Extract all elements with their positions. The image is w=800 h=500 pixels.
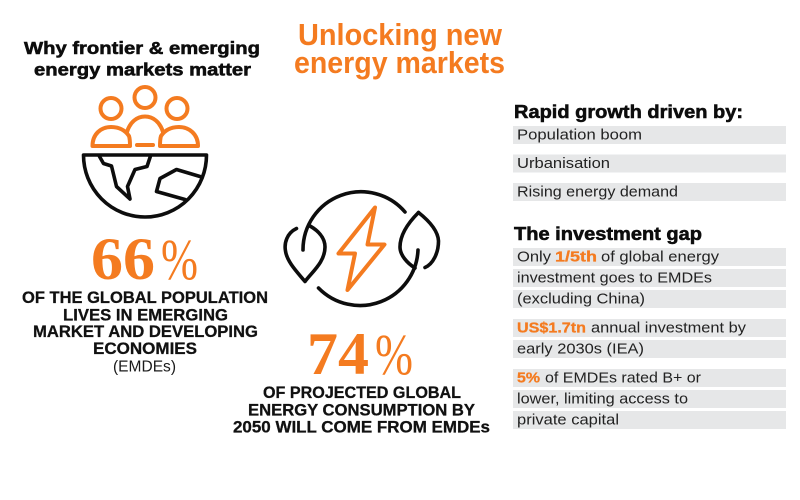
item: urbanisation xyxy=(513,154,786,172)
text: consumption description: 2050 WILL COME FROM EMDEs xyxy=(233,418,490,436)
panel: rapid growth xyxy=(513,102,786,201)
item: rising energy demand xyxy=(513,183,786,201)
text: population description: OF THE GLOBAL POPULATION xyxy=(22,288,268,307)
item: urbanisation: Urbanisation xyxy=(517,155,610,172)
text: consumption description: OF PROJECTED GLOBAL xyxy=(263,383,461,402)
item: credit ratings: private capital xyxy=(517,412,619,428)
text: population description: ECONOMIES xyxy=(93,339,197,358)
title: energy markets xyxy=(294,45,505,80)
item: annual investment: annual investment by xyxy=(591,320,747,336)
heading: rapid growth: Rapid growth driven by: xyxy=(514,102,743,122)
stat: 74% xyxy=(307,321,413,387)
title: Unlocking new xyxy=(298,17,503,52)
stat: 74%: % xyxy=(375,322,413,387)
item: one fifth of investment: 1/5th xyxy=(555,248,597,266)
panel: investment gap xyxy=(513,224,786,429)
item: one fifth of investment: (excluding China) xyxy=(517,290,645,308)
icon: globe xyxy=(84,155,206,217)
icon: lightning bolt xyxy=(338,208,384,290)
icon: cycle arrows and leaves xyxy=(285,192,438,306)
left heading xyxy=(24,38,260,80)
item: annual investment: US$1.7tn xyxy=(517,320,586,336)
item: population boom xyxy=(513,126,786,144)
item: one fifth of investment: Only xyxy=(517,248,552,266)
item: population boom: Population boom xyxy=(517,126,642,144)
icon: energy cycle with leaves and bolt xyxy=(285,192,438,306)
stat: 66%: 66 xyxy=(91,226,155,292)
item: credit ratings: lower, limiting access to xyxy=(517,390,688,408)
text: population description: LIVES IN EMERGING xyxy=(63,306,228,324)
heading: investment gap: The investment gap xyxy=(514,224,702,244)
text: population description xyxy=(22,288,268,376)
text: consumption description: ENERGY CONSUMPTION BY xyxy=(248,400,476,420)
text: consumption description xyxy=(233,383,490,436)
left heading: Why frontier & emerging xyxy=(24,38,260,58)
icon: people xyxy=(92,87,198,146)
item: credit ratings: 5% xyxy=(517,370,540,386)
stat: 66%: % xyxy=(161,227,198,292)
item: one fifth of investment: investment goes to EMDEs xyxy=(517,270,712,286)
item: annual investment xyxy=(513,319,786,358)
text: population description: (EMDEs) xyxy=(113,358,176,376)
left heading: energy markets matter xyxy=(34,60,251,80)
item: credit ratings xyxy=(513,369,786,429)
stat: 66% xyxy=(91,226,198,292)
stat: 74%: 74 xyxy=(307,321,369,387)
item: one fifth of investment xyxy=(513,248,786,308)
item: one fifth of investment: of global energy xyxy=(601,248,720,266)
title xyxy=(294,17,505,80)
icon: people on globe xyxy=(84,87,206,217)
item: rising energy demand: Rising energy demand xyxy=(517,184,678,200)
text: population description: MARKET AND DEVELOPING xyxy=(33,322,258,341)
item: annual investment: early 2030s (IEA) xyxy=(517,340,644,358)
item: credit ratings: of EMDEs rated B+ or xyxy=(545,370,701,386)
